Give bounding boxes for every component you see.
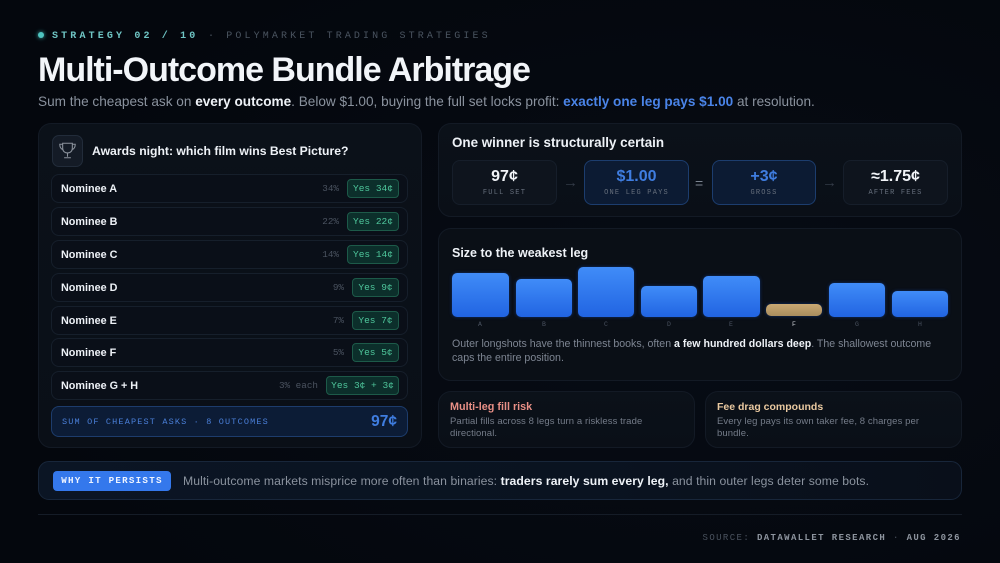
subtitle: Sum the cheapest ask on every outcome. Below $1.00, buying the full set locks profit: exactly one leg pays $1.00 at resolution. xyxy=(38,94,815,109)
heading: size to weakest leg: Size to the weakest leg xyxy=(452,246,588,260)
card: multi-leg fill risk: Multi-leg fill risk xyxy=(450,401,532,413)
bar chart: F xyxy=(792,321,796,328)
stat: after fees: AFTER FEES xyxy=(868,189,922,197)
heading: One winner is structurally certain xyxy=(452,135,664,150)
card: multi-leg fill risk: Partial fills across 8 legs turn a riskless trade xyxy=(450,416,642,427)
eyebrow: strategy label xyxy=(35,29,491,42)
arrow: → xyxy=(563,174,578,191)
bar chart xyxy=(450,265,950,328)
row: nominee F: 5% xyxy=(333,347,344,358)
badge: WHY IT PERSISTS xyxy=(61,475,163,486)
bar chart: E xyxy=(729,321,733,328)
chart caption xyxy=(452,338,931,364)
stat: gross: +3¢ xyxy=(750,168,778,185)
stat: after fees: ≈1.75¢ xyxy=(871,168,920,185)
divider xyxy=(38,514,962,515)
row: nominee E xyxy=(51,306,408,335)
row: nominee E: 7% xyxy=(333,315,344,326)
stat: gross xyxy=(712,160,816,205)
card: fee drag compounds: Fee drag compounds xyxy=(717,401,823,413)
badge xyxy=(53,471,171,491)
row: nominee D: Yes 9¢ xyxy=(358,282,393,293)
row: nominee B xyxy=(51,207,408,236)
stat: one leg pays xyxy=(584,160,689,205)
chart caption: Outer longshots have the thinnest books, often a few hundred dollars deep. The shallowest outcome xyxy=(452,338,931,350)
row: nominee D xyxy=(51,273,408,302)
eyebrow: strategy label: STRATEGY 02 / 10 xyxy=(52,31,198,42)
row: nominee B: 22% xyxy=(322,216,339,227)
row: nominee D: Nominee D xyxy=(61,282,117,294)
bar chart: H xyxy=(918,321,922,328)
row: nominee F: Nominee F xyxy=(61,347,116,359)
bar chart: C xyxy=(604,321,608,328)
bar chart: G xyxy=(855,321,859,328)
row: nominee A: 34% xyxy=(322,183,339,194)
row: nominee G + H: Nominee G + H xyxy=(61,380,138,392)
card: multi-leg fill risk xyxy=(438,391,695,448)
bar chart: B xyxy=(542,321,546,328)
footer source: SOURCE: DATAWALLET RESEARCH · AUG 2026 xyxy=(703,533,961,543)
callout text: Multi-outcome markets misprice more often than binaries: traders rarely sum every leg, and thin outer legs deter some bots. xyxy=(183,474,869,488)
panel: size to weakest leg xyxy=(438,228,962,381)
card: fee drag compounds: bundle. xyxy=(717,428,749,439)
row: nominee B: Nominee B xyxy=(61,216,117,228)
bar chart: A xyxy=(478,321,482,328)
row: nominee B: Yes 22¢ xyxy=(353,216,393,227)
row: nominee E: Yes 7¢ xyxy=(358,315,393,326)
stat: full set: FULL SET xyxy=(483,189,526,197)
stat: after fees xyxy=(843,160,948,205)
row: nominee C xyxy=(51,240,408,269)
panel: nominee list xyxy=(38,123,422,448)
row: nominee F xyxy=(51,338,408,367)
icon: trophy xyxy=(52,135,83,167)
equals: = xyxy=(695,175,703,191)
stat: full set: 97¢ xyxy=(491,168,518,185)
eyebrow: strategy label: · POLYMARKET TRADING STRATEGIES xyxy=(208,31,491,42)
arrow: → xyxy=(822,174,837,191)
row: nominee E: Nominee E xyxy=(61,315,117,327)
callout: why it persists xyxy=(38,461,962,500)
row: nominee D: 9% xyxy=(333,282,344,293)
stat: gross: GROSS xyxy=(750,189,778,197)
sum row xyxy=(51,406,408,437)
stat: one leg pays: ONE LEG PAYS xyxy=(604,189,669,197)
row: nominee C: 14% xyxy=(322,249,339,260)
stat: one leg pays: $1.00 xyxy=(616,168,657,185)
row: nominee G + H: 3% each xyxy=(279,380,318,391)
row: nominee G + H: Yes 3¢ + 3¢ xyxy=(331,380,394,391)
sum row: SUM OF CHEAPEST ASKS · 8 OUTCOMES xyxy=(62,417,269,427)
row: nominee C: Nominee C xyxy=(61,249,117,261)
card: fee drag compounds: Every leg pays its own taker fee, 8 charges per xyxy=(717,416,919,427)
card: fee drag compounds xyxy=(705,391,962,448)
bar chart: D xyxy=(667,321,671,328)
stat: full set xyxy=(452,160,557,205)
card: multi-leg fill risk: directional. xyxy=(450,428,497,439)
row: nominee F: Yes 5¢ xyxy=(358,347,393,358)
row: nominee G + H xyxy=(51,371,408,400)
status dot xyxy=(38,32,44,38)
row: nominee A: Nominee A xyxy=(61,183,117,195)
row: nominee C: Yes 14¢ xyxy=(353,249,393,260)
chart caption: caps the entire position. xyxy=(452,352,564,364)
sum row: 97¢ xyxy=(371,413,397,430)
panel heading: Awards night: which film wins Best Picture? xyxy=(92,144,348,158)
row: nominee A: Yes 34¢ xyxy=(353,183,393,194)
row: nominee A xyxy=(51,174,408,203)
panel: one winner xyxy=(438,123,962,217)
title: Multi-Outcome Bundle Arbitrage xyxy=(38,51,530,89)
